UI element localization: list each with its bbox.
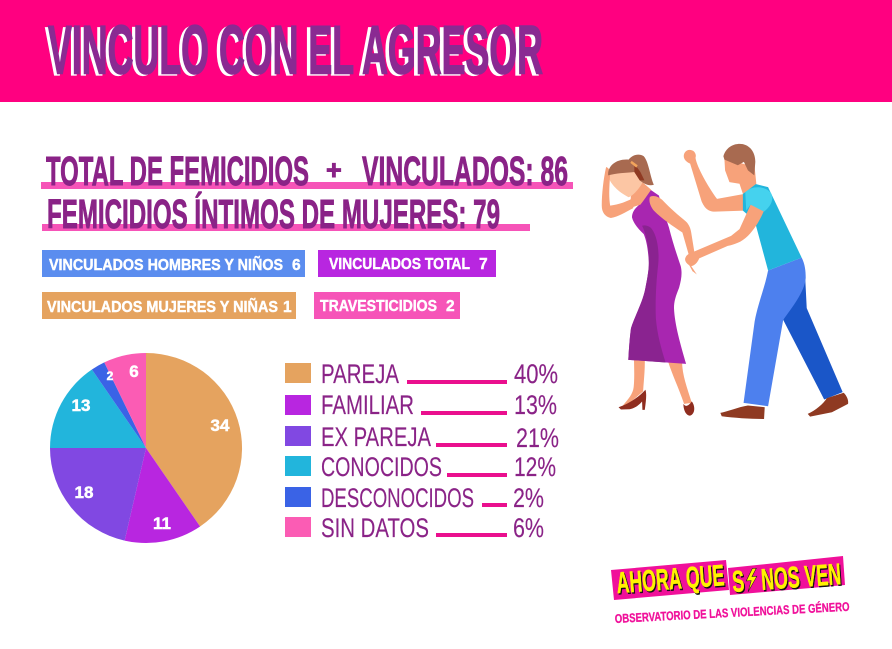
woman dress (628, 190, 686, 364)
badge: vinculados mujeres y niñas (42, 292, 296, 319)
badge: vinculados total (318, 250, 496, 277)
logo text: ahora que: AHORA QUE (615, 559, 726, 600)
heading: femicidios íntimos de mujeres (42, 191, 530, 237)
woman hair (608, 155, 654, 185)
man (684, 144, 848, 419)
woman legs (622, 358, 645, 406)
man sleeve (745, 187, 772, 212)
badge: vinculados total: 7 (479, 256, 488, 273)
logo: ahora que sí nos ven (611, 556, 850, 626)
header banner (0, 0, 892, 102)
man hair (723, 144, 755, 175)
pie chart: 6 (129, 362, 139, 381)
badge: vinculados hombres y niños: VINCULADOS HOMBRES Y NIÑOS (49, 256, 283, 274)
legend row: desconocidos: 2% (513, 483, 544, 513)
man raised arm (684, 150, 745, 212)
logo text: ahora que (615, 559, 727, 602)
heading: total de femicidios y vinculados: VINCULADOS: 86 (362, 148, 568, 194)
badge: vinculados total: VINCULADOS TOTAL (329, 256, 470, 273)
legend row: sin datos (285, 513, 544, 543)
badge: vinculados hombres y niños (42, 250, 305, 277)
logo text: ahora que: AHORA QUE (617, 561, 727, 602)
pie chart (50, 353, 242, 543)
legend row: conocidos: 12% (514, 452, 556, 482)
woman arm behind (649, 196, 695, 256)
logo text: sí nos ven: S (731, 565, 745, 599)
man near leg (744, 258, 806, 406)
legend row: sin datos: SIN DATOS (321, 513, 429, 543)
woman neck (630, 180, 651, 208)
man far leg (783, 274, 843, 399)
badge: travesticidios: TRAVESTICIDIOS (320, 298, 437, 315)
man shirt (743, 184, 802, 270)
legend row: familiar (285, 390, 557, 420)
badge: travesticidios (314, 292, 460, 319)
heading: femicidios íntimos de mujeres: FEMICIDIOS ÍNTIMOS DE MUJERES: 79 (47, 191, 500, 237)
legend row: desconocidos: DESCONOCIDOS (321, 483, 474, 513)
heading: total de femicidios y vinculados: TOTAL DE FEMICIDIOS (46, 148, 309, 194)
legend row: sin datos: 6% (513, 513, 544, 543)
logo text: sí nos ven: S (732, 567, 747, 600)
heading: total de femicidios y vinculados: + (326, 155, 342, 185)
woman arm on head (602, 167, 637, 218)
legend row: pareja: PAREJA (321, 359, 399, 389)
badge: vinculados hombres y niños: 6 (292, 257, 301, 274)
pie chart: 34 (211, 416, 230, 435)
legend row: conocidos: CONOCIDOS (321, 452, 442, 482)
legend row: ex pareja: EX PAREJA (321, 422, 431, 452)
legend row: ex pareja: 21% (516, 423, 559, 453)
woman face (608, 170, 644, 197)
legend row: conocidos (285, 452, 556, 482)
badge: travesticidios: 2 (446, 298, 455, 315)
legend row: pareja (285, 359, 558, 389)
legend row: familiar: FAMILIAR (321, 390, 414, 420)
pie chart: 18 (75, 483, 93, 502)
woman shoes (619, 390, 646, 410)
badge: vinculados mujeres y niñas: 1 (283, 299, 292, 316)
man lower arm (685, 205, 764, 266)
legend row: ex pareja (285, 422, 559, 453)
legend row: familiar: 13% (514, 390, 557, 420)
pie chart: 2 (107, 369, 114, 383)
legend (285, 359, 559, 543)
man neck and face (724, 159, 756, 194)
man shoes (720, 406, 765, 419)
pie chart: 13 (72, 396, 90, 415)
logo banner (611, 556, 845, 600)
illustration: man attacking woman (602, 144, 848, 419)
title (45, 12, 543, 90)
badge: vinculados mujeres y niñas: VINCULADOS MUJERES Y NIÑAS (47, 298, 278, 316)
pie chart: 11 (153, 514, 171, 533)
logo text: sí nos ven (731, 558, 843, 600)
legend row: pareja: 40% (514, 359, 558, 389)
woman (602, 155, 695, 416)
